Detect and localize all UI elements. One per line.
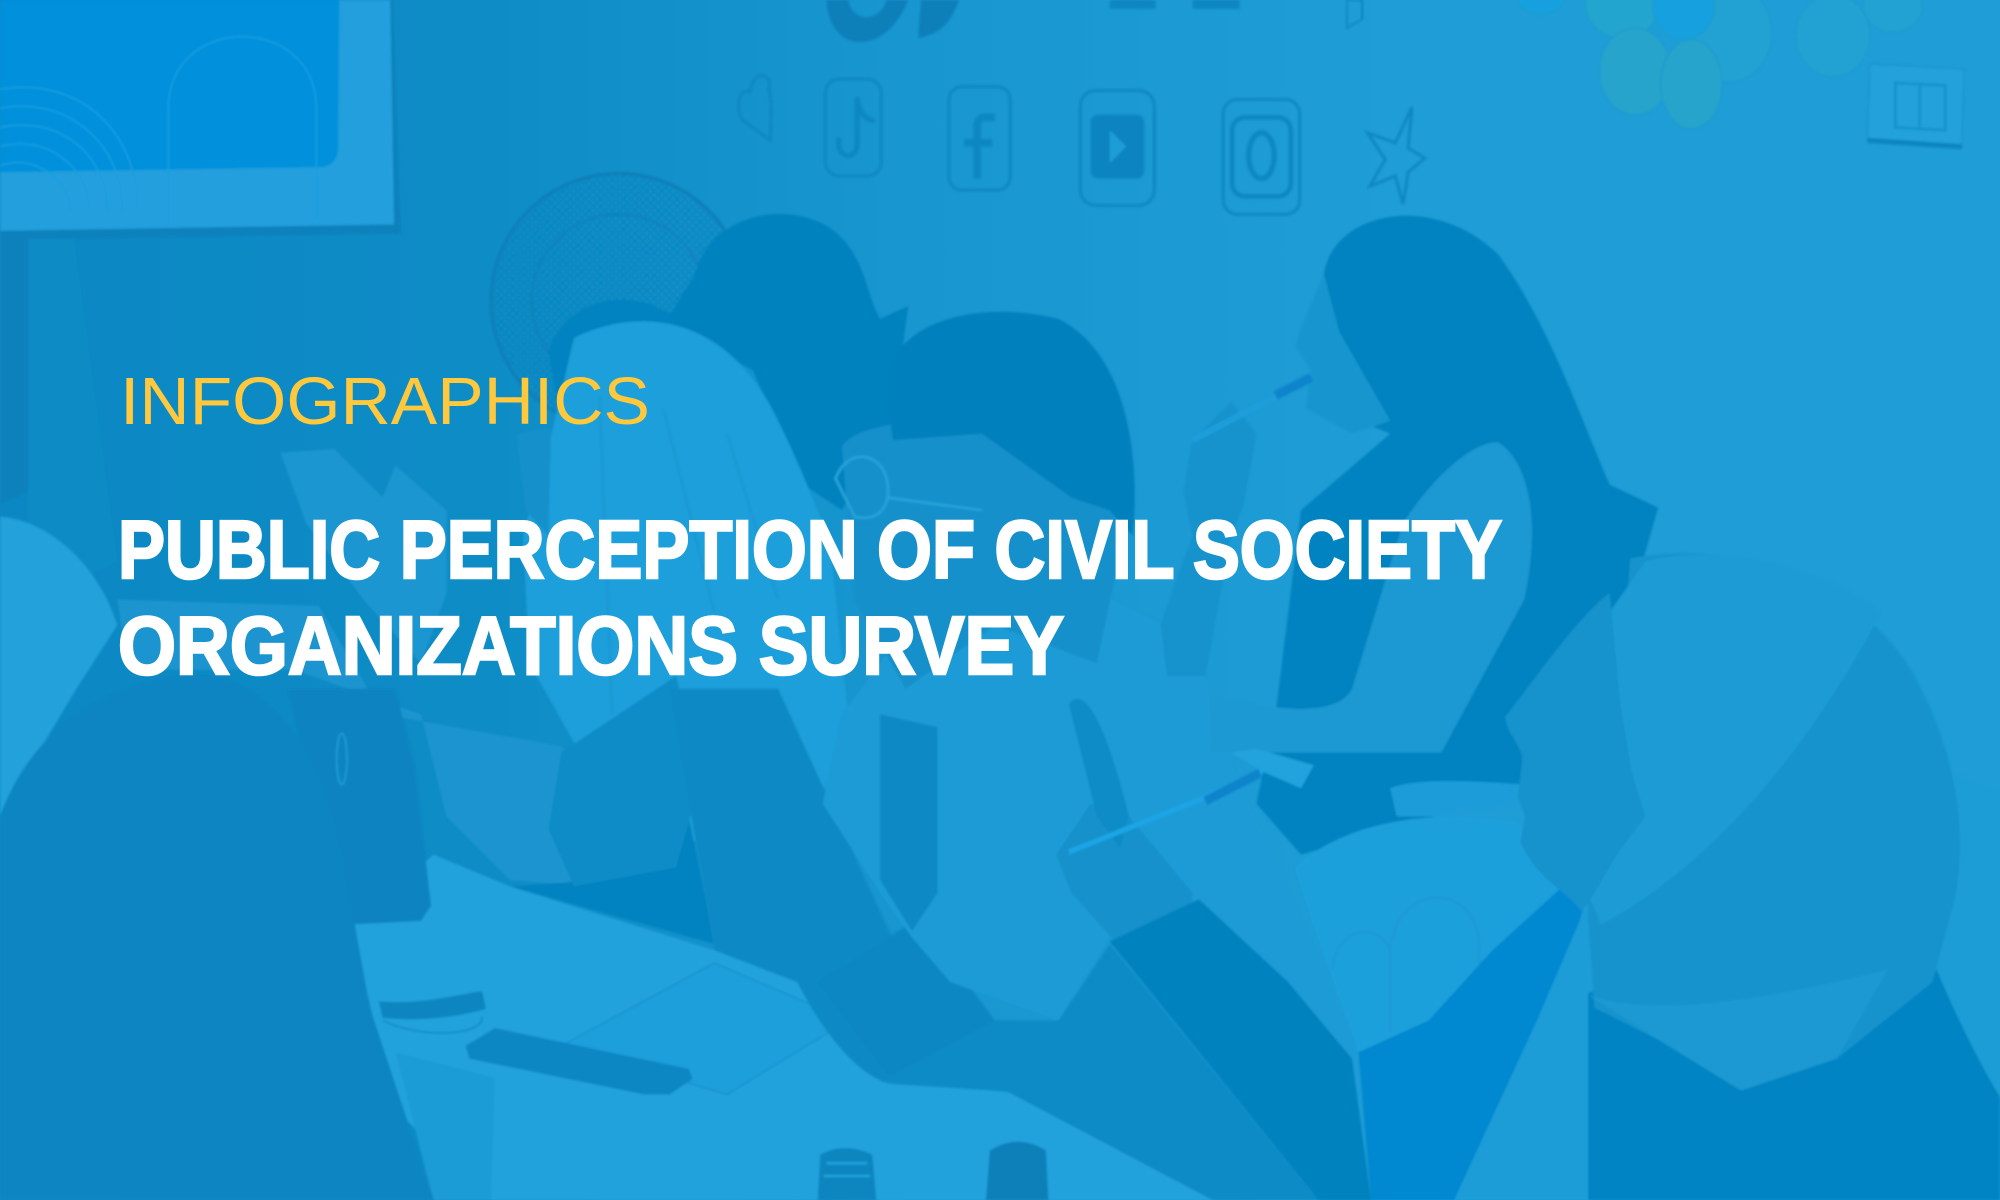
dark sleeve of right woman bbox=[1110, 899, 1371, 1200]
sticky notes bbox=[1518, 0, 1922, 129]
raised hands bbox=[281, 449, 446, 663]
standing fan bbox=[491, 173, 746, 429]
title line 1: PUBLIC PERCEPTION OF CIVIL SOCIETY bbox=[118, 503, 1502, 596]
table apron and leg bbox=[395, 1052, 495, 1200]
foreground dark person bbox=[0, 676, 434, 1200]
table top bbox=[351, 855, 1213, 1200]
plastic chair bbox=[1295, 781, 1569, 1052]
title line 2: ORGANIZATIONS SURVEY bbox=[118, 599, 1064, 692]
man in shirt bbox=[823, 312, 1365, 1065]
left foreground hijab bbox=[0, 517, 117, 816]
laptop and sleeve bbox=[117, 599, 714, 944]
paper on table bbox=[561, 963, 848, 1094]
phone case bbox=[379, 991, 486, 1019]
blue sleeve bbox=[1358, 886, 1588, 1200]
light switch bbox=[1867, 64, 1964, 149]
presentation screen bbox=[0, 0, 401, 240]
bottles on table bbox=[818, 1142, 1048, 1200]
main title bbox=[118, 503, 1502, 692]
top wall shapes bbox=[827, 0, 1362, 42]
hijab person bbox=[517, 321, 848, 880]
phone on table bbox=[466, 1028, 693, 1094]
social media wall icons bbox=[739, 75, 1425, 214]
person in background bbox=[663, 214, 908, 510]
screen stand bbox=[28, 239, 117, 599]
forearm and elbow bbox=[670, 689, 1014, 1092]
hand with pen bbox=[1056, 699, 1263, 957]
handbag bbox=[287, 689, 431, 925]
subtitle: infographics: INFOGRAPHICS bbox=[120, 364, 650, 439]
clipboard bbox=[1231, 749, 1314, 788]
right foreground woman bbox=[1454, 553, 2000, 1200]
man's lower arm bbox=[880, 944, 1319, 1200]
woman with long hair bbox=[1161, 216, 1658, 855]
